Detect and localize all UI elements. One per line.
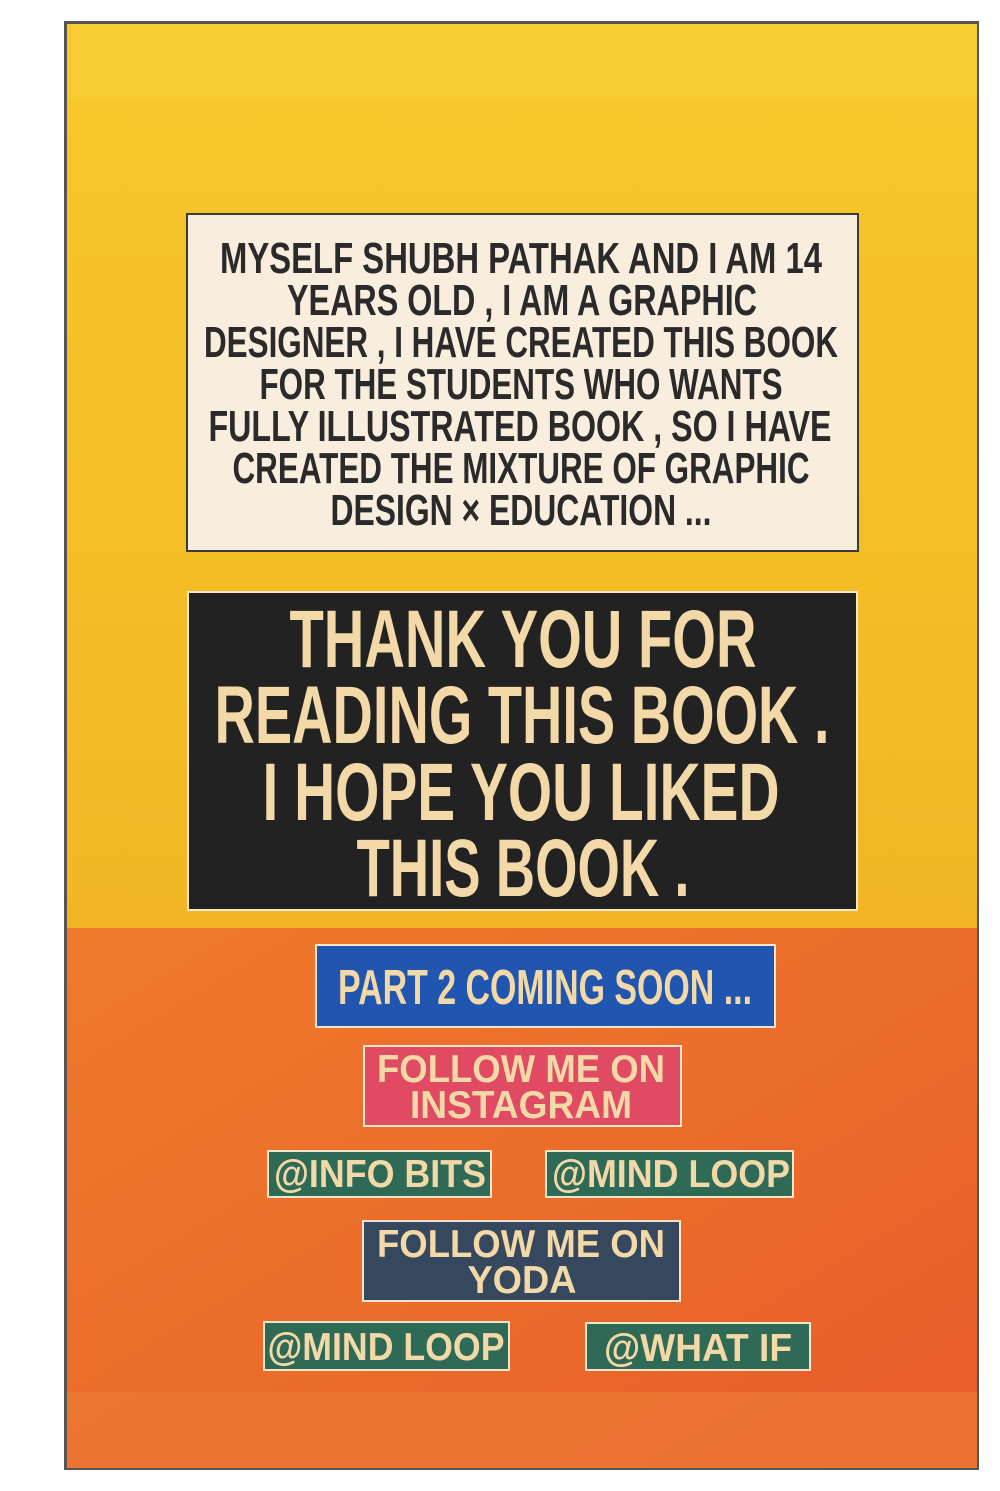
tag: @what if: @WHAT IF — [604, 1327, 792, 1370]
banner: part 2 coming soon: PART 2 COMING SOON ... — [338, 961, 752, 1015]
heading: thank you: THANK YOU FOR — [290, 594, 756, 685]
heading: thank you — [188, 592, 857, 914]
label: follow on yoda: FOLLOW ME ON — [377, 1223, 665, 1266]
heading: thank you: THIS BOOK . — [356, 823, 690, 914]
heading: thank you: I HOPE YOU LIKED — [262, 747, 780, 838]
text block: about author — [187, 214, 858, 551]
tag: @mind loop (yoda): @MIND LOOP — [268, 1326, 504, 1369]
banner: part 2 coming soon — [316, 945, 775, 1027]
label: follow on instagram: INSTAGRAM — [410, 1084, 632, 1127]
tag: @mind loop (instagram): @MIND LOOP — [552, 1153, 790, 1196]
label: follow on yoda — [363, 1221, 680, 1302]
tag: @info bits: @INFO BITS — [274, 1153, 486, 1196]
label: follow on instagram — [364, 1046, 681, 1127]
text block: about author: DESIGN × EDUCATION ... — [330, 486, 712, 535]
label: follow on instagram: FOLLOW ME ON — [377, 1048, 665, 1091]
label: follow on yoda: YODA — [468, 1259, 576, 1302]
text block: about author: FOR THE STUDENTS WHO WANTS — [260, 360, 782, 409]
text block: about author: YEARS OLD , I AM A GRAPHIC — [287, 276, 757, 325]
